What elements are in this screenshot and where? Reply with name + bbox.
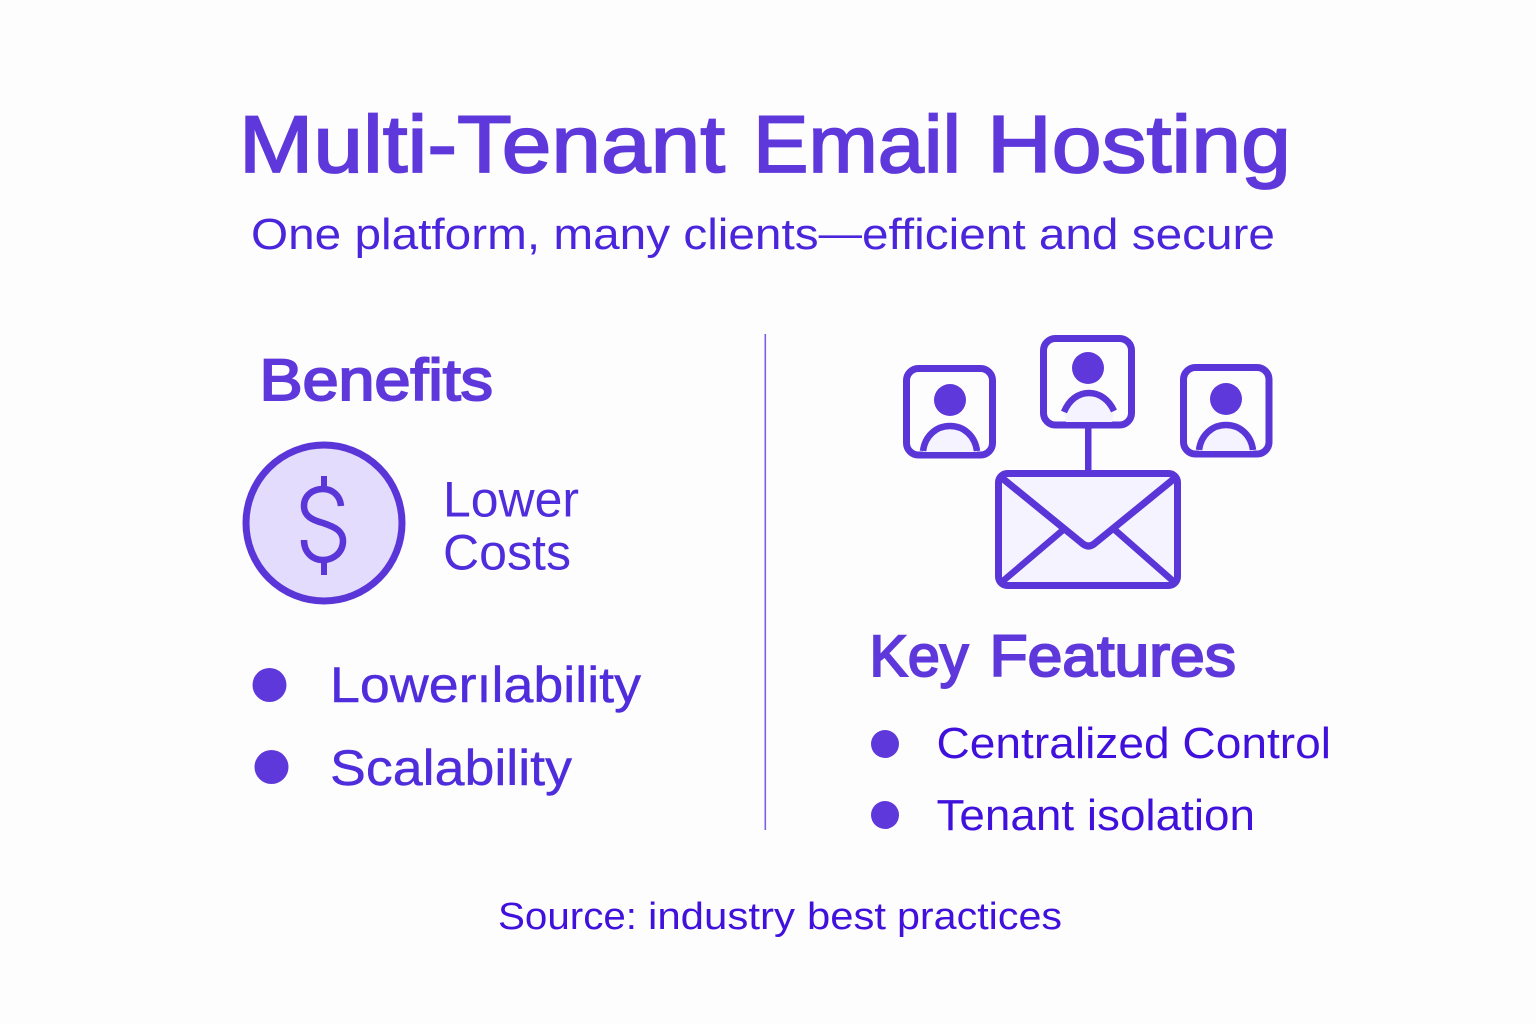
icon: envelope — [998, 474, 1178, 586]
source note: industry — [648, 896, 795, 938]
icon: tenants connected to envelope — [906, 338, 1269, 586]
heading: benefits: Benefits — [260, 348, 493, 413]
bullet item: tenant isolation: Tenant isolation — [936, 791, 1255, 840]
bullet item: centralized control: Centralized Control — [936, 719, 1331, 768]
panel: key features — [870, 338, 1331, 840]
heading: key features: Features — [990, 624, 1236, 689]
icon: center tenant — [1044, 338, 1132, 425]
subtitle: efficient and secure — [862, 210, 1275, 259]
title — [239, 100, 1291, 190]
subtitle: — — [819, 212, 862, 256]
text: lower costs: Lower — [443, 472, 579, 528]
heading: key features: Key — [870, 624, 968, 689]
text: lower costs — [443, 472, 579, 580]
bullet item: scalability: Scalability — [330, 740, 572, 796]
title: Email — [753, 100, 961, 190]
source note — [498, 896, 1062, 938]
heading: key features — [870, 624, 1236, 689]
divider — [764, 334, 766, 830]
text: lower costs: Costs — [443, 524, 571, 580]
title: Multi-Tenant — [239, 100, 725, 190]
source note: practices — [897, 896, 1062, 938]
connector line — [1085, 426, 1092, 474]
title: Hosting — [987, 100, 1291, 190]
source note: best — [807, 896, 886, 938]
source note: Source: — [498, 896, 637, 938]
panel: benefits — [246, 348, 641, 796]
icon: right tenant — [1184, 368, 1269, 454]
icon: dollar coin — [246, 445, 402, 601]
subtitle: One platform, many clients — [251, 210, 774, 259]
bullet item: lower liability: Lowerılability — [330, 657, 641, 713]
icon: left tenant — [906, 368, 992, 455]
